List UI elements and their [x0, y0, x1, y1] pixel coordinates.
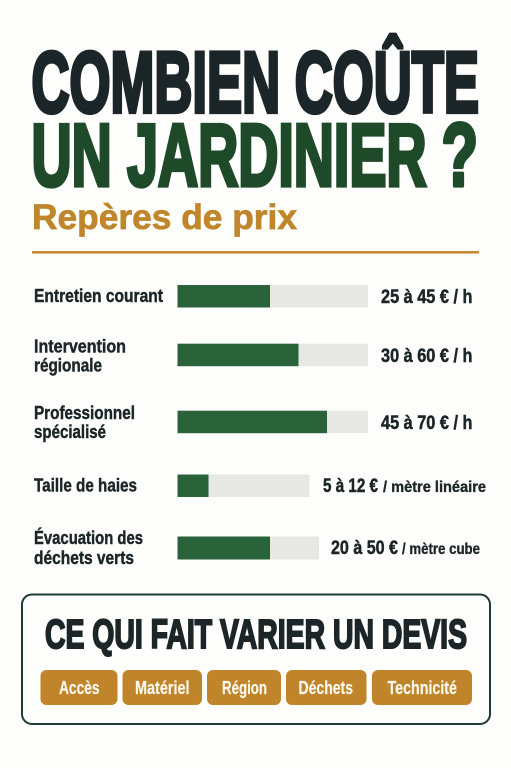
row: évacuation des déchets verts: [34, 527, 480, 568]
panel: ce qui fait varier un devis: [22, 594, 490, 724]
label: Évacuation des: [34, 527, 143, 548]
bar track: [178, 536, 319, 560]
label: déchets verts: [34, 547, 134, 568]
title: [32, 35, 479, 204]
price: 45 à 70 € / h: [381, 413, 472, 434]
chip: accès: [40, 670, 118, 705]
row: intervention régionale: [34, 336, 472, 376]
unit: / mètre linéaire: [383, 479, 486, 496]
label: Professionnel: [34, 402, 135, 423]
chip: région: Région: [222, 678, 267, 698]
chip: accès: Accès: [59, 678, 100, 698]
price: 5 à 12 €: [323, 476, 378, 497]
chip: déchets: Déchets: [298, 678, 353, 698]
divider: [32, 251, 479, 254]
price: 25 à 45 € / h: [381, 287, 472, 308]
price: 20 à 50 €: [331, 538, 398, 559]
label: spécialisé: [34, 421, 106, 442]
row: entretien courant: [34, 285, 472, 308]
bar fill: [178, 344, 298, 366]
row: taille de haies: [34, 474, 486, 497]
panel frame: [22, 594, 490, 724]
chip: matériel: Matériel: [135, 678, 190, 698]
title line 2: ?: [442, 104, 478, 204]
row: professionnel spécialisé: [34, 402, 472, 442]
chip: déchets: [286, 670, 366, 705]
bar track: [178, 474, 310, 497]
bar fill: [178, 411, 327, 433]
chip: technicité: Technicité: [388, 678, 457, 698]
label: Intervention: [34, 336, 126, 356]
bar track: [178, 285, 368, 308]
bar track: [178, 344, 368, 366]
bar fill: [178, 536, 270, 560]
bar track: [178, 411, 368, 433]
subtitle: Repères de prix: [32, 198, 298, 237]
price: 30 à 60 € / h: [381, 346, 472, 367]
unit: / mètre cube: [402, 541, 480, 558]
label: régionale: [34, 354, 102, 376]
label: Taille de haies: [34, 474, 137, 496]
bar fill: [178, 474, 208, 497]
chip: technicité: [372, 670, 472, 705]
chip: matériel: [122, 670, 202, 705]
chip: région: [207, 670, 281, 705]
bar fill: [178, 285, 270, 308]
label: Entretien courant: [34, 285, 163, 306]
